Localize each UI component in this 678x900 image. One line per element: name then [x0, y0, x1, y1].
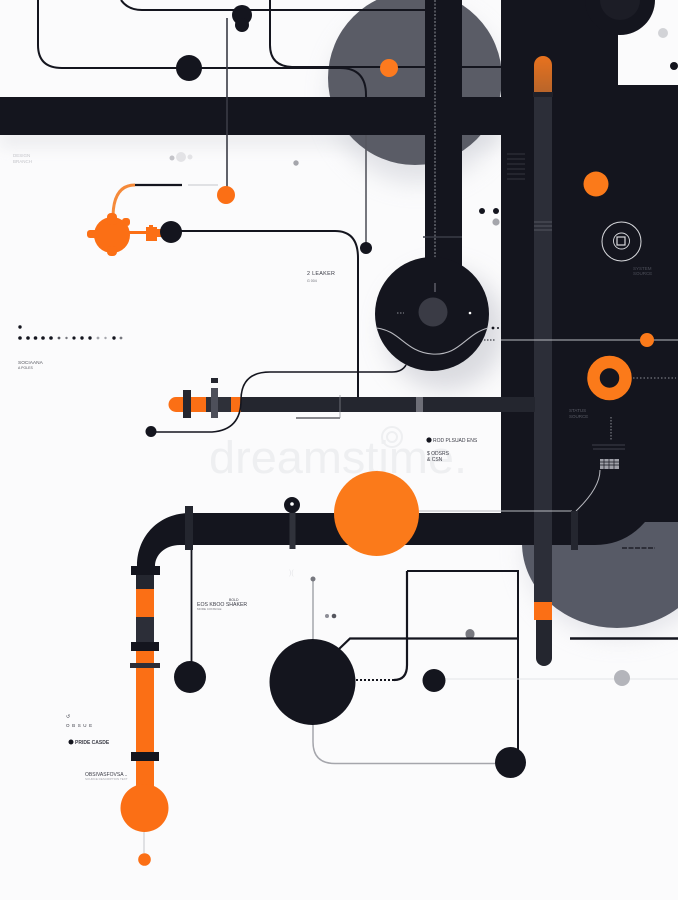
ring: orange ring — [594, 362, 626, 394]
pipe: orange vertical — [120, 566, 168, 866]
faint mark: )( — [289, 570, 294, 577]
valve: orange assembly — [87, 185, 218, 256]
pipe collar mark — [423, 236, 462, 238]
node: black circle mid — [422, 669, 446, 692]
line: black right — [570, 637, 678, 640]
circle: bottom-right grey disc — [522, 458, 678, 628]
small dots near stem — [325, 614, 336, 618]
node: small black end — [146, 426, 156, 437]
circle: large orange — [334, 471, 419, 556]
text: left labels: OBSIVASFOVSA .. — [85, 772, 127, 778]
text: small dark-panel label — [569, 408, 588, 419]
dashed centre line — [434, 0, 436, 270]
node: small grey dome — [466, 629, 474, 639]
text: faint dark-panel label: SYSTEM — [633, 266, 652, 271]
wire: loop around pipe — [150, 365, 406, 432]
dotted line from ring — [633, 377, 676, 379]
text: faint dark-panel label: SOURCE — [633, 271, 652, 276]
text: label left — [18, 360, 44, 370]
pipe: top wiring — [38, 0, 534, 248]
pipe: horizontal middle — [168, 378, 535, 418]
pipe redrawn vertical over elbow — [534, 511, 552, 545]
pipe: top horizontal bar — [0, 97, 501, 135]
arrow dash on grey disc — [622, 547, 655, 549]
top-right circle — [585, 0, 655, 35]
text: label centre: G 004 — [307, 279, 317, 283]
clamp on pipe left — [185, 506, 193, 550]
shadow: big dial — [385, 270, 505, 390]
gauge: small knob on pipe — [284, 497, 300, 549]
text: label left: A POLES — [18, 366, 33, 370]
text: label beside stem: EOS KBOO SHAKER — [197, 602, 247, 608]
text: legend centre-right: & CSN — [427, 457, 443, 463]
text: left labels — [66, 714, 128, 781]
text: legend centre-right: ROD PLSUAD ENS — [433, 438, 478, 444]
small dots near dial — [479, 208, 500, 340]
pipe: large horizontal elbow — [137, 513, 534, 566]
text: small dark-panel label: SOURCE — [569, 414, 588, 419]
watermark spiral — [382, 427, 402, 447]
small faint marks top left — [170, 152, 299, 166]
text: faint top-left label: BRANCH — [13, 159, 32, 164]
text: label beside stem — [197, 598, 247, 611]
text: label beside stem: MORE CONSOLE — [197, 607, 222, 611]
small top-right dots — [658, 28, 678, 70]
line: faint horizontal — [446, 678, 678, 680]
node: orange circle on drop line — [217, 186, 235, 204]
text: small dark-panel label: STATUS — [569, 408, 586, 413]
node: orange on line — [640, 333, 654, 347]
dot row — [18, 325, 122, 340]
text: faint dark-panel label — [633, 266, 652, 276]
wire network lower right — [339, 571, 518, 750]
node: black ball on stem — [174, 550, 206, 693]
grid marker on dark panel — [507, 154, 525, 179]
node: top black circle — [176, 55, 202, 81]
connector and grid in dark panel — [576, 417, 625, 511]
vertical lighter pipe in dark panel — [533, 56, 553, 666]
dial: large black circle — [375, 257, 489, 371]
text: left labels: OBSUE — [66, 723, 95, 728]
text: label left: SOCIAANA — [18, 360, 44, 366]
node: top orange circle — [380, 59, 398, 77]
text: watermark: dreamstime. — [209, 432, 467, 483]
text: faint top-left label — [13, 153, 32, 164]
node: black circle with line — [160, 221, 358, 398]
node: grey end circle — [614, 670, 630, 686]
text: label centre — [307, 271, 335, 283]
text: faint top-left label: DESIGN — [13, 153, 30, 158]
icon: target circle — [602, 222, 641, 261]
text: label centre: 2 LEAKER — [307, 271, 335, 277]
text: legend centre-right — [426, 437, 478, 463]
text: left labels: ↺ — [66, 714, 70, 720]
circle: top grey disc — [328, 0, 506, 183]
panel: dark right block — [501, 0, 678, 545]
text: left labels: PRIDE CASDE — [75, 740, 110, 746]
line: horizontal light — [501, 339, 678, 341]
shadow under top bar — [0, 130, 501, 146]
node: top capsule — [232, 5, 252, 32]
node: black end circle — [360, 242, 372, 254]
node: big black circle cluster — [270, 576, 498, 764]
shadow: bottom-right disc — [525, 467, 678, 637]
pipe: central vertical — [425, 0, 462, 275]
pipe: wires over elbow — [419, 510, 572, 512]
node: orange circle on dark panel — [584, 172, 608, 196]
text: left labels: SOURCE DESCRIPTION TEXT — [85, 777, 128, 781]
text: legend centre-right: $ ODSRS — [427, 451, 450, 457]
clamp on pipe right — [571, 511, 578, 550]
node: black circle lower — [495, 747, 526, 778]
text: label beside stem: BOLD — [229, 598, 239, 602]
